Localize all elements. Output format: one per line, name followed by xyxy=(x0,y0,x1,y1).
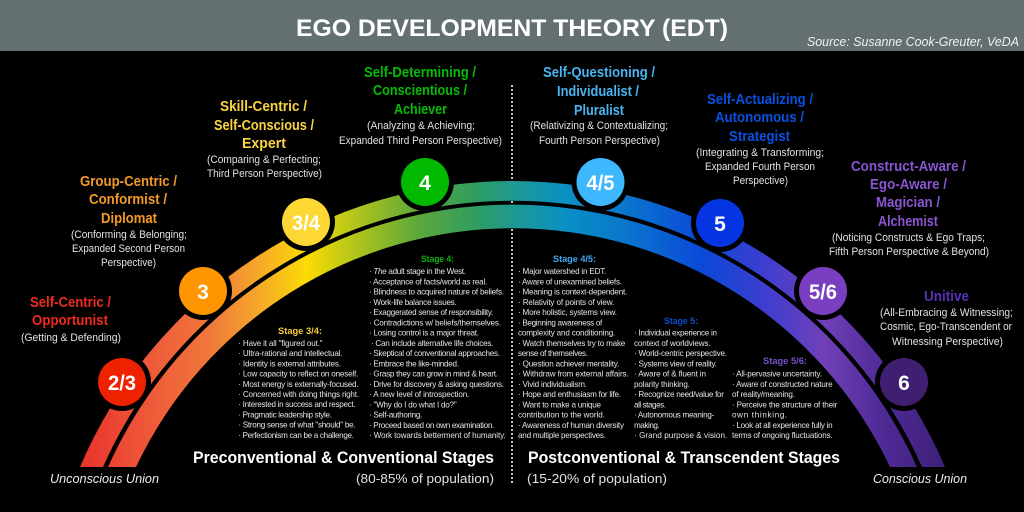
text block: Stage 4/5: · Hope and enthusiasm for life. xyxy=(518,390,621,399)
text block: Stage 4/5: Stage 4/5: xyxy=(553,254,596,264)
stage node 5/6 xyxy=(799,267,847,315)
caption: preconventional stages: (80-85% of population) xyxy=(356,471,494,486)
label: Skill-Centric / Self-Conscious / Expert: Self-Conscious / xyxy=(214,118,314,134)
label: Construct-Aware / Ego-Aware / Magician / Alchemist: Construct-Aware / xyxy=(851,159,966,175)
text block: Stage 4: · Contradictions w/ beliefs/themselves. xyxy=(369,318,501,327)
text block: Stage 5: context of worldviews. xyxy=(634,339,711,348)
text block: Stage 4: · Blindness to acquired nature of beliefs. xyxy=(369,288,504,296)
stage node 3/4 xyxy=(282,198,330,246)
text block: Stage 4/5: · Meaning is context-dependent. xyxy=(518,288,627,296)
text block: Stage 5: · Autonomous meaning- xyxy=(634,410,715,420)
header banner xyxy=(0,0,1024,51)
label: Self-Actualizing / Autonomous / Strategist: Expanded Fourth Person xyxy=(705,161,815,173)
text block: Stage 5: Stage 5: xyxy=(664,316,698,326)
text block: Stage 4: · Can include alternative life choices. xyxy=(371,339,493,348)
label: Self-Determining / Conscientious / Achiever: Conscientious / xyxy=(373,83,467,99)
text block: Stage 3/4: · Interested in success and respect. xyxy=(238,400,356,409)
stage node 4: 4 xyxy=(419,172,431,195)
text block: Stage 3/4: · Most energy is externally-focused. xyxy=(238,380,359,389)
inner rainbow arc xyxy=(108,205,917,467)
label: Self-Questioning / Individualist / Pluralist: Pluralist xyxy=(574,103,624,119)
label: Self-Determining / Conscientious / Achiever: (Analyzing & Achieving; xyxy=(367,120,475,132)
label: Self-Centric / Opportunist: (Getting & Defending) xyxy=(21,332,121,344)
text block: Stage 4/5: and multiple perspectives. xyxy=(518,431,606,440)
label: Group-Centric / Conformist / Diplomat: (Conforming & Belonging; xyxy=(71,229,187,241)
text block: Stage 5: making. xyxy=(634,421,660,430)
text block: Stage 4 xyxy=(369,254,506,440)
text block: Stage 3/4 xyxy=(238,326,359,440)
label: Self-Determining / Conscientious / Achiever: Expanded Third Person Perspective) xyxy=(339,135,502,147)
label: Self-Determining / Conscientious / Achiever: Achiever xyxy=(394,102,447,118)
caption: preconventional stages xyxy=(193,449,494,486)
stage node 4 xyxy=(401,158,449,206)
label: Unitive: (All-Embracing & Witnessing; xyxy=(880,307,1013,319)
label: Self-Actualizing / Autonomous / Strategist: (Integrating & Transforming; xyxy=(696,147,824,159)
stage node 3 xyxy=(179,267,227,315)
label: Construct-Aware / Ego-Aware / Magician / Alchemist: Ego-Aware / xyxy=(870,177,947,193)
text block: Stage 4/5: · Beginning awareness of xyxy=(518,318,603,327)
text block: Stage 4/5: contribution to the world. xyxy=(518,410,605,420)
label: Self-Actualizing / Autonomous / Strategist: Strategist xyxy=(729,129,790,145)
text block: Stage 4: · Exaggerated sense of responsibility. xyxy=(369,308,493,317)
label: Self-Questioning / Individualist / Pluralist: Self-Questioning / xyxy=(543,65,655,81)
text block: Stage 4/5: · Withdraw from external affairs. xyxy=(518,370,629,378)
text block: Stage 5 xyxy=(634,316,727,440)
stage node 2/3: 2/3 xyxy=(108,372,136,395)
text block: Stage 4/5: · Want to make a unique xyxy=(518,400,601,409)
text block: Stage 3/4: · Perfectionism can be a challenge. xyxy=(238,431,354,440)
source credit: Source: Susanne Cook-Greuter, VeDA xyxy=(807,34,1019,49)
label: Self-Actualizing / Autonomous / Strategist: Perspective) xyxy=(733,175,788,187)
text block: Stage 4/5: · More holistic, systems view. xyxy=(518,308,617,317)
label: Skill-Centric / Self-Conscious / Expert: Skill-Centric / xyxy=(220,99,307,115)
text block: Stage 5/6: Stage 5/6: xyxy=(763,356,807,366)
text block: Stage 4: · "Why do I do what I do?" xyxy=(369,400,457,409)
text block: Stage 5/6: · Perceive the structure of their xyxy=(732,400,838,409)
label: Self-Centric / Opportunist: Self-Centric / xyxy=(30,295,111,311)
text block: Stage 5: all stages. xyxy=(634,400,666,409)
label: Group-Centric / Conformist / Diplomat xyxy=(71,174,187,269)
stage node 3/4: 3/4 xyxy=(292,212,320,235)
label: Self-Actualizing / Autonomous / Strategist: Self-Actualizing / xyxy=(707,92,813,108)
label: Construct-Aware / Ego-Aware / Magician / Alchemist: (Noticing Constructs & Ego Traps; xyxy=(832,232,985,244)
text block: Stage 5: · Systems view of reality. xyxy=(634,359,717,368)
label: Skill-Centric / Self-Conscious / Expert: Expert xyxy=(242,136,286,152)
stage node 4/5: 4/5 xyxy=(586,172,615,195)
text block: Stage 4: · Acceptance of facts/world as real. xyxy=(369,277,487,286)
text block: Stage 5: · Aware of & fluent in xyxy=(634,370,706,378)
text block: Stage 5: polarity thinking. xyxy=(634,380,690,389)
text block: Stage 4/5: · Vivid individualism. xyxy=(518,380,587,389)
text block: Stage 5: · Recognize need/value for xyxy=(634,390,724,399)
text block: Stage 5: · Grand purpose & vision. xyxy=(634,431,727,440)
label: Group-Centric / Conformist / Diplomat: Perspective) xyxy=(101,257,156,269)
label: Self-Questioning / Individualist / Pluralist: Fourth Person Perspective) xyxy=(539,135,660,147)
outer rainbow arc xyxy=(80,181,945,467)
stage node 5 xyxy=(696,199,744,247)
text block: Stage 3/4: · Identity is external attributes. xyxy=(238,359,341,368)
label: Self-Actualizing / Autonomous / Strategist: Autonomous / xyxy=(715,110,804,126)
label: Group-Centric / Conformist / Diplomat: Expanded Second Person xyxy=(72,243,185,255)
text block: Stage 4: · Embrace the like-minded. xyxy=(369,359,459,368)
text block: Stage 5/6: · All-pervasive uncertainty. xyxy=(732,370,822,378)
label: Construct-Aware / Ego-Aware / Magician / Alchemist: Magician / xyxy=(876,195,940,211)
caption: postconventional stages xyxy=(527,449,840,486)
label: Self-Questioning / Individualist / Pluralist: Individualist / xyxy=(557,84,639,100)
text block: Stage 5/6: own thinking. xyxy=(732,410,787,420)
caption: postconventional stages: Postconventional & Transcendent Stages xyxy=(528,449,840,467)
text block: Stage 5/6 xyxy=(732,356,838,440)
label: Self-Actualizing / Autonomous / Strategist xyxy=(696,92,824,187)
circle separators xyxy=(93,153,933,411)
caption: postconventional stages: (15-20% of population) xyxy=(527,471,667,486)
text block: Stage 3/4: Stage 3/4: xyxy=(278,326,322,336)
text block: Stage 4/5: · Relativity of points of view. xyxy=(518,298,614,307)
label: Unitive: Unitive xyxy=(924,289,969,305)
stage node 4/5 xyxy=(576,158,624,206)
text block: Stage 3/4: · Low capacity to reflect on oneself. xyxy=(238,370,358,379)
text block: Stage 4: · Skeptical of conventional approaches. xyxy=(369,349,500,358)
text block: Stage 4/5: sense of themselves. xyxy=(518,349,588,358)
center divider xyxy=(511,85,513,484)
text block: Stage 5/6: terms of ongoing fluctuations. xyxy=(732,431,833,440)
text block: Stage 4: · The adult stage in the West. xyxy=(369,267,466,276)
text block: Stage 4/5: · Awareness of human diversity xyxy=(518,421,625,430)
title: EGO DEVELOPMENT THEORY (EDT) xyxy=(296,15,728,42)
text block: Stage 4: · Work-life balance issues. xyxy=(369,298,457,307)
caption: preconventional stages: Preconventional & Conventional Stages xyxy=(193,449,494,467)
stage node 6: 6 xyxy=(898,372,910,395)
text block: Stage 4/5 xyxy=(518,254,629,440)
text block: Stage 5/6: · Look at all experience fully in xyxy=(732,421,833,430)
text block: Stage 3/4: · Concerned with doing things right. xyxy=(238,390,359,399)
label: Skill-Centric / Self-Conscious / Expert: (Comparing & Perfecting; xyxy=(207,154,321,166)
text block: Stage 4: · Drive for discovery & asking questions. xyxy=(369,380,504,389)
text block: Stage 5: · Individual experience in xyxy=(634,328,717,338)
label: Construct-Aware / Ego-Aware / Magician / Alchemist xyxy=(829,159,989,258)
label: Unitive xyxy=(880,289,1013,348)
label: Construct-Aware / Ego-Aware / Magician / Alchemist: Alchemist xyxy=(878,214,938,230)
stage node 5: 5 xyxy=(714,213,726,236)
stage node 2/3 xyxy=(98,358,146,406)
text block: Stage 4/5: complexity and conditioning. xyxy=(518,328,615,338)
label: Group-Centric / Conformist / Diplomat: Group-Centric / xyxy=(80,174,177,190)
text block: Stage 4/5: · Watch themselves try to make xyxy=(518,339,626,348)
label: Self-Centric / Opportunist: Opportunist xyxy=(32,313,108,329)
text block: Stage 5/6: · Aware of constructed nature xyxy=(732,380,833,389)
stage node 3: 3 xyxy=(197,281,209,304)
text block: Stage 3/4: · Have it all "figured out." xyxy=(238,339,323,348)
text block: Stage 3/4: · Strong sense of what "should" be. xyxy=(238,421,356,430)
text block: Stage 3/4: · Pragmatic leadership style. xyxy=(238,410,332,419)
text block: Stage 4: Stage 4: xyxy=(421,254,454,264)
text block: Stage 5/6: of reality/meaning. xyxy=(732,390,795,399)
stage node 6 xyxy=(880,358,928,406)
text block: Stage 4: · Work towards betterment of humanity. xyxy=(369,431,506,440)
label: Unitive: Witnessing Perspective) xyxy=(892,336,1003,348)
label: Self-Centric / Opportunist xyxy=(21,295,121,344)
text block: Stage 4/5: · Aware of unexamined beliefs. xyxy=(518,277,622,286)
label: Self-Questioning / Individualist / Pluralist xyxy=(530,65,668,147)
text block: Stage 4: · Proceed based on own examination. xyxy=(369,421,494,430)
text block: Stage 4: · Grasp they can grow in mind & heart. xyxy=(369,370,498,378)
text block: Stage 4: · Losing control is a major threat. xyxy=(369,328,479,338)
label: Construct-Aware / Ego-Aware / Magician / Alchemist: Fifth Person Perspective & Beyond) xyxy=(829,246,989,258)
text block: Stage 4/5: · Major watershed in EDT. xyxy=(518,267,606,276)
text block: Stage 3/4: · Ultra-rational and intellectual. xyxy=(238,349,343,358)
label: Unitive: Cosmic, Ego-Transcendent or xyxy=(880,321,1012,333)
label: Self-Determining / Conscientious / Achiever xyxy=(339,65,502,147)
text block: Stage 5: · World-centric perspective. xyxy=(634,349,727,358)
label: Self-Determining / Conscientious / Achiever: Self-Determining / xyxy=(364,65,476,81)
label: Skill-Centric / Self-Conscious / Expert: Third Person Perspective) xyxy=(207,168,322,180)
caption: conscious union: Conscious Union xyxy=(873,471,967,486)
text block: Stage 4: · A new level of introspection. xyxy=(369,390,469,399)
stage node 5/6: 5/6 xyxy=(809,281,837,304)
label: Self-Questioning / Individualist / Pluralist: (Relativizing & Contextualizing; xyxy=(530,120,668,132)
label: Skill-Centric / Self-Conscious / Expert xyxy=(207,99,322,180)
caption: unconscious union: Unconscious Union xyxy=(50,471,159,486)
label: Group-Centric / Conformist / Diplomat: Conformist / xyxy=(89,192,167,208)
text block: Stage 4/5: · Question achiever mentality. xyxy=(518,359,619,368)
text block: Stage 4: · Self-authoring. xyxy=(369,410,422,420)
label: Group-Centric / Conformist / Diplomat: Diplomat xyxy=(101,211,157,227)
